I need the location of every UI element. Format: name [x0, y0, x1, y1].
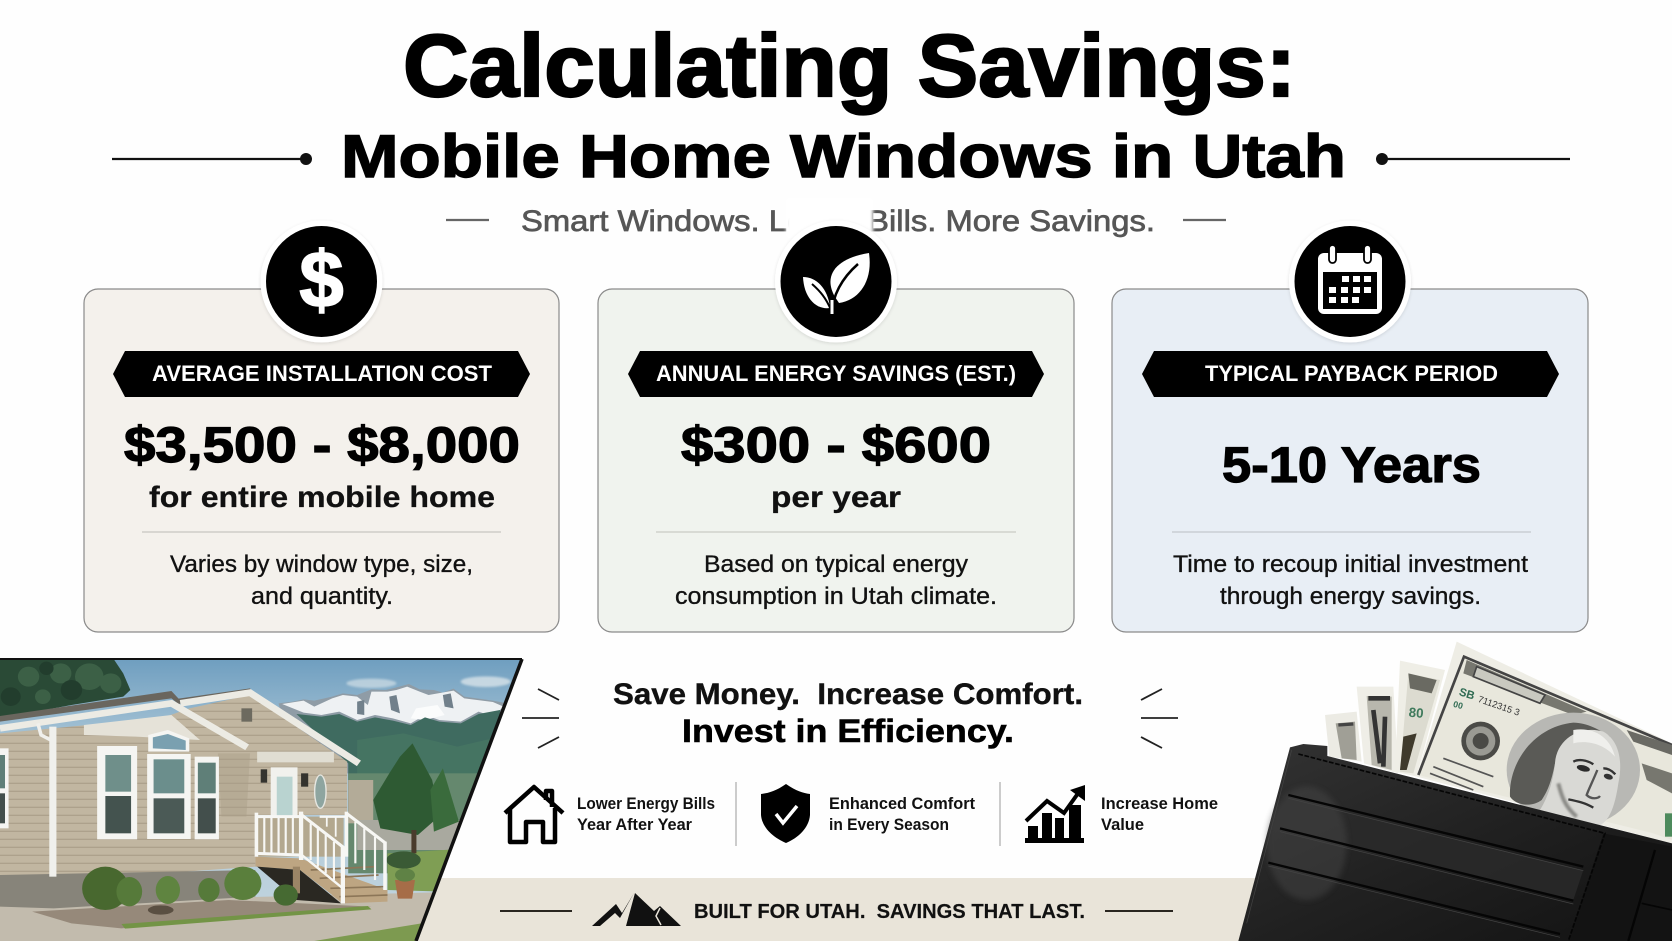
banner: ANNUAL ENERGY SAVINGS (EST.): [656, 361, 1016, 386]
photo: wallet with cash: [1238, 642, 1672, 941]
description: Based on typical energy: [704, 551, 968, 578]
description: [675, 551, 997, 610]
banner: [1142, 351, 1559, 397]
icon: rising chart: [1025, 785, 1085, 843]
icon: dollar: $: [299, 235, 344, 324]
benefit: lower energy bills: [505, 787, 715, 842]
porch and stairs: [255, 857, 387, 903]
bill serial: SB: [1457, 686, 1476, 702]
description: and quantity.: [251, 583, 393, 610]
label: in Every Season: [829, 815, 949, 834]
ground: [0, 892, 464, 941]
subtitle with side rules: Mobile Home Windows in Utah: [341, 123, 1346, 190]
subtitle with side rules: [112, 123, 1570, 190]
icon: shield: [761, 784, 810, 843]
shrubs: [82, 867, 129, 910]
footer band: [380, 878, 1280, 941]
label: Lower Energy Bills: [577, 794, 715, 813]
banner: TYPICAL PAYBACK PERIOD: [1205, 361, 1498, 386]
label: Increase Home: [1101, 794, 1218, 813]
description: [170, 551, 473, 610]
label: [829, 794, 975, 834]
value: 5-10 Years: [1222, 437, 1481, 493]
portrait: [1507, 713, 1640, 827]
left tree: [0, 660, 130, 718]
description: through energy savings.: [1220, 583, 1481, 610]
label: Year After Year: [577, 815, 692, 834]
icon: leaf: [775, 220, 897, 342]
description: Time to recoup initial investment: [1173, 551, 1528, 578]
seal: [1461, 722, 1500, 760]
photo: mobile home with mountains: [0, 657, 560, 941]
banner: AVERAGE INSTALLATION COST: [152, 361, 493, 386]
benefit: enhanced comfort: [761, 784, 975, 843]
value unit: per year: [771, 481, 901, 514]
photo: wallet with cash: 7112315 3: [1477, 694, 1521, 718]
icon: house: [505, 787, 563, 842]
value: $3,500 - $8,000: [124, 417, 520, 473]
panel: average installation cost: [84, 220, 559, 632]
label: [1101, 794, 1218, 834]
decorative rays right: [1141, 689, 1178, 748]
tagline: [446, 198, 1226, 238]
value: $300 - $600: [681, 417, 991, 473]
icon: calendar: [1289, 220, 1411, 342]
roof: [0, 688, 254, 722]
banner: [113, 351, 530, 397]
far mountains: [279, 684, 507, 773]
footer message: BUILT FOR UTAH. SAVINGS THAT LAST.: [694, 900, 1085, 923]
footer message: [500, 893, 1173, 926]
porch backing siding: [258, 817, 344, 857]
slogan: [613, 678, 1083, 749]
panel: annual energy savings: [598, 220, 1074, 632]
tagline: Smart Windows. Lower Bills. More Savings.: [521, 205, 1155, 238]
value unit: for entire mobile home: [149, 481, 495, 514]
bills: [1325, 712, 1362, 762]
door: [271, 767, 297, 817]
gutter: [49, 727, 56, 877]
description: Varies by window type, size,: [170, 551, 473, 578]
right tree: [373, 743, 437, 835]
description: consumption in Utah climate.: [675, 583, 997, 610]
panel: typical payback period: [1112, 220, 1588, 632]
label: [577, 794, 715, 834]
benefit: increase home value: [1025, 785, 1218, 843]
title: Calculating Savings:: [403, 16, 1296, 115]
decorative rays left: [522, 689, 559, 748]
banner: [628, 351, 1044, 397]
icon: mountains: [592, 893, 681, 926]
description: [1173, 551, 1528, 610]
slogan: Save Money. Increase Comfort.: [613, 678, 1083, 711]
wallet body: [1238, 744, 1672, 941]
pot: [395, 880, 415, 899]
label: Value: [1101, 815, 1144, 834]
icon: dollar: [260, 220, 382, 342]
house walls: [0, 720, 139, 878]
photo: wallet with cash: 00: [1452, 699, 1464, 711]
photo: wallet with cash: 80: [1408, 705, 1424, 721]
photo frame edges: [0, 659, 522, 941]
stitching: [1268, 754, 1672, 941]
label: Enhanced Comfort: [829, 794, 975, 813]
slogan: Invest in Efficiency.: [682, 713, 1014, 749]
windows: [97, 746, 137, 839]
